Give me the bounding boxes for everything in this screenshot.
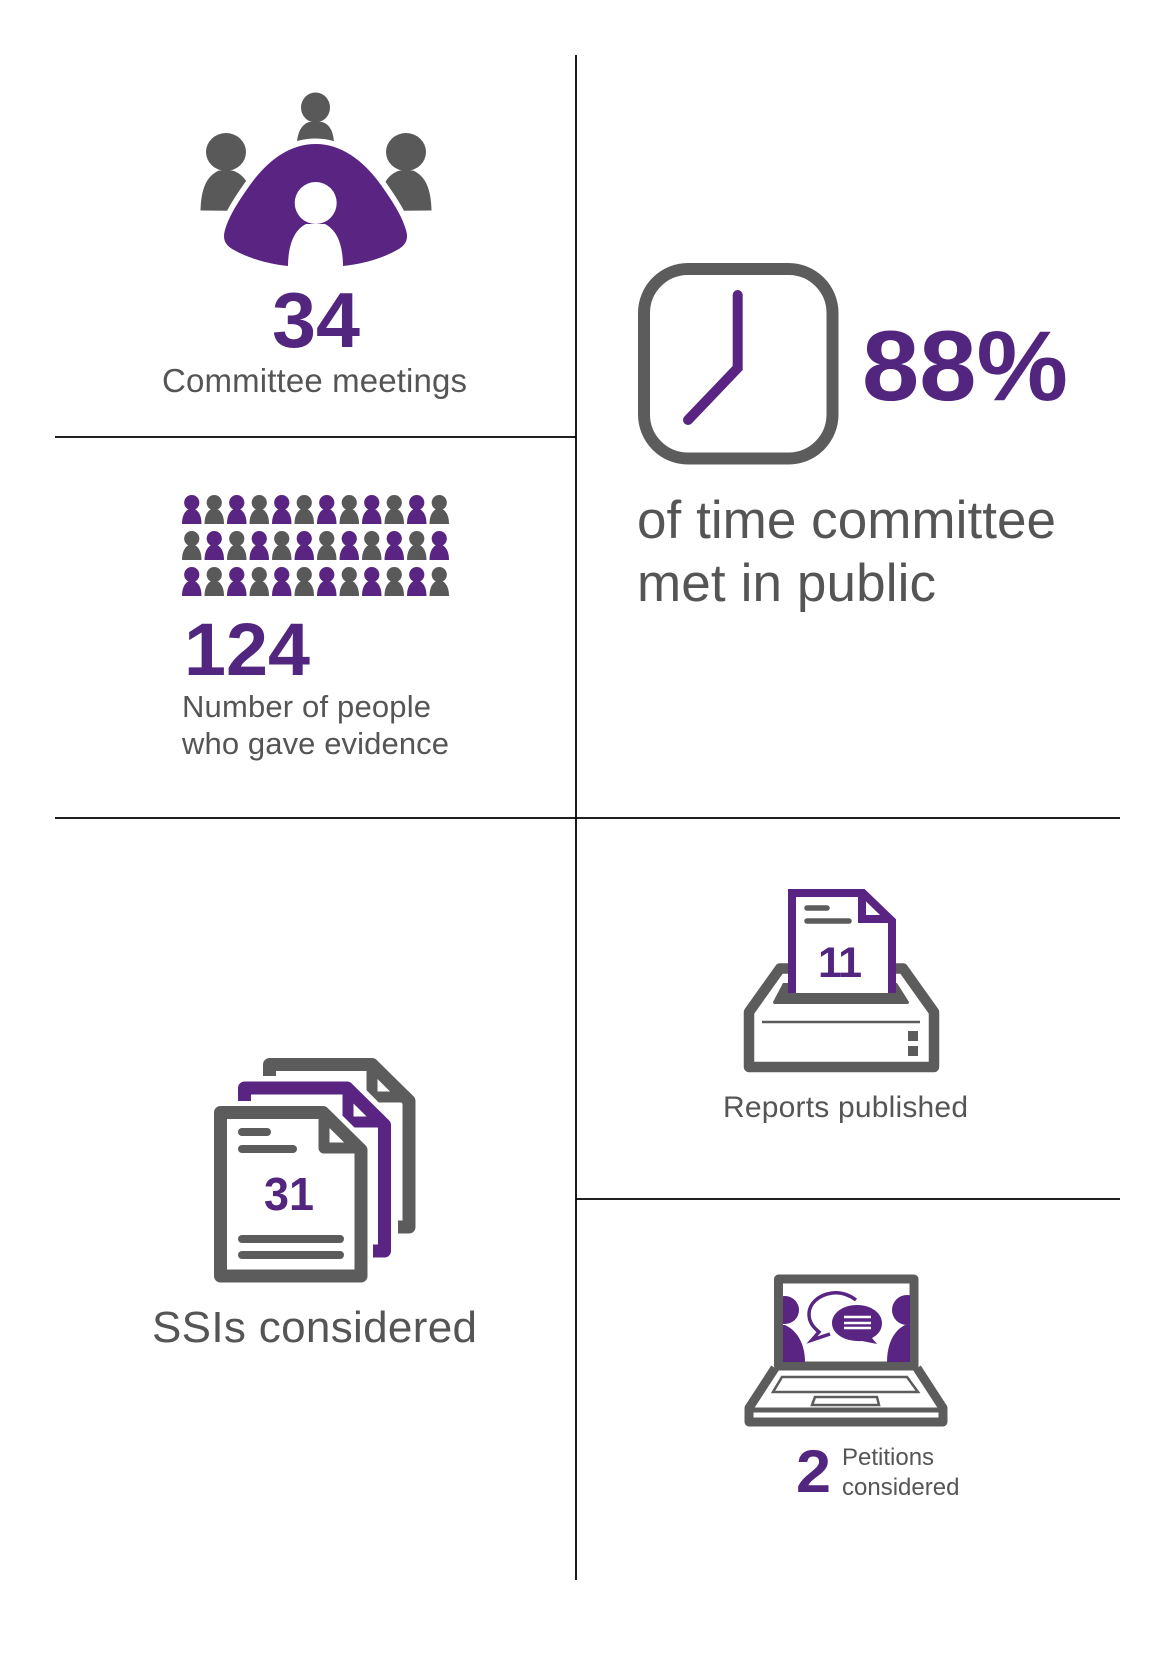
number: 11: 11 (818, 939, 862, 987)
number: 31: 31 (264, 1168, 314, 1220)
number: 88%: 88% (862, 310, 1068, 421)
icon: people around a table (200, 92, 432, 267)
label: Petitions considered: considered (842, 1474, 959, 1501)
number: 124: 124 (184, 608, 310, 691)
label: of time committee met in public: met in public (637, 554, 936, 613)
panel: SSIs considered (152, 1064, 477, 1352)
icon: stacked documents (220, 1064, 409, 1300)
panel: time met in public (637, 269, 1068, 613)
label: of time committee met in public: of time committee (637, 491, 1056, 550)
icon: rows of people (182, 495, 449, 596)
icon: laptop with speech bubbles (749, 1279, 943, 1422)
label: Committee meetings: Committee meetings (162, 362, 467, 399)
label: SSIs considered: SSIs considered (152, 1303, 477, 1352)
label: Reports published: Reports published (723, 1091, 968, 1124)
panel: petitions considered (749, 1279, 959, 1505)
panel: committee meetings (162, 92, 467, 399)
label: Number of people who gave evidence: who gave evidence (181, 726, 449, 761)
panel: reports published (723, 893, 968, 1124)
label: Number of people who gave evidence: Number of people (182, 689, 431, 724)
number: 34: 34 (272, 276, 360, 364)
icon: clock (644, 269, 832, 458)
number: 2: 2 (796, 1438, 831, 1505)
label: Petitions considered: Petitions (842, 1444, 934, 1471)
icon: printer with report (749, 893, 934, 1067)
panel: people who gave evidence (181, 495, 449, 761)
